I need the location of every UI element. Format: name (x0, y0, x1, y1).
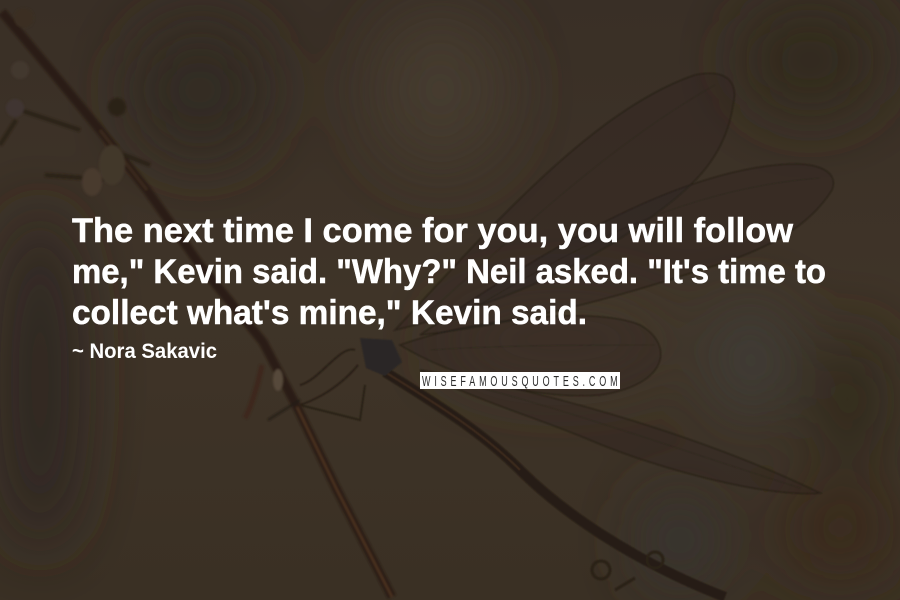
plant buds (6, 8, 283, 391)
dragonfly body (385, 372, 725, 597)
plant sprig at bottom (592, 552, 663, 590)
quote text (72, 212, 826, 332)
quote text: The next time I come for you, you will follow (72, 212, 794, 250)
logo: wisefamousquotes: WISEFAMOUSQUOTES.COM (422, 373, 618, 390)
dragonfly head (360, 338, 402, 376)
wing veins (420, 85, 820, 488)
illustration: plant stems (0, 8, 392, 597)
quote text: collect what's mine," Kevin said. (72, 294, 587, 332)
author attribution: ~ Nora Sakavic (72, 340, 217, 363)
illustration: dragonfly (300, 73, 833, 597)
dragonfly legs (300, 350, 365, 420)
quote text: me," Kevin said. "Why?" Neil asked. "It's time to (72, 253, 826, 291)
dragonfly wings (395, 73, 833, 494)
